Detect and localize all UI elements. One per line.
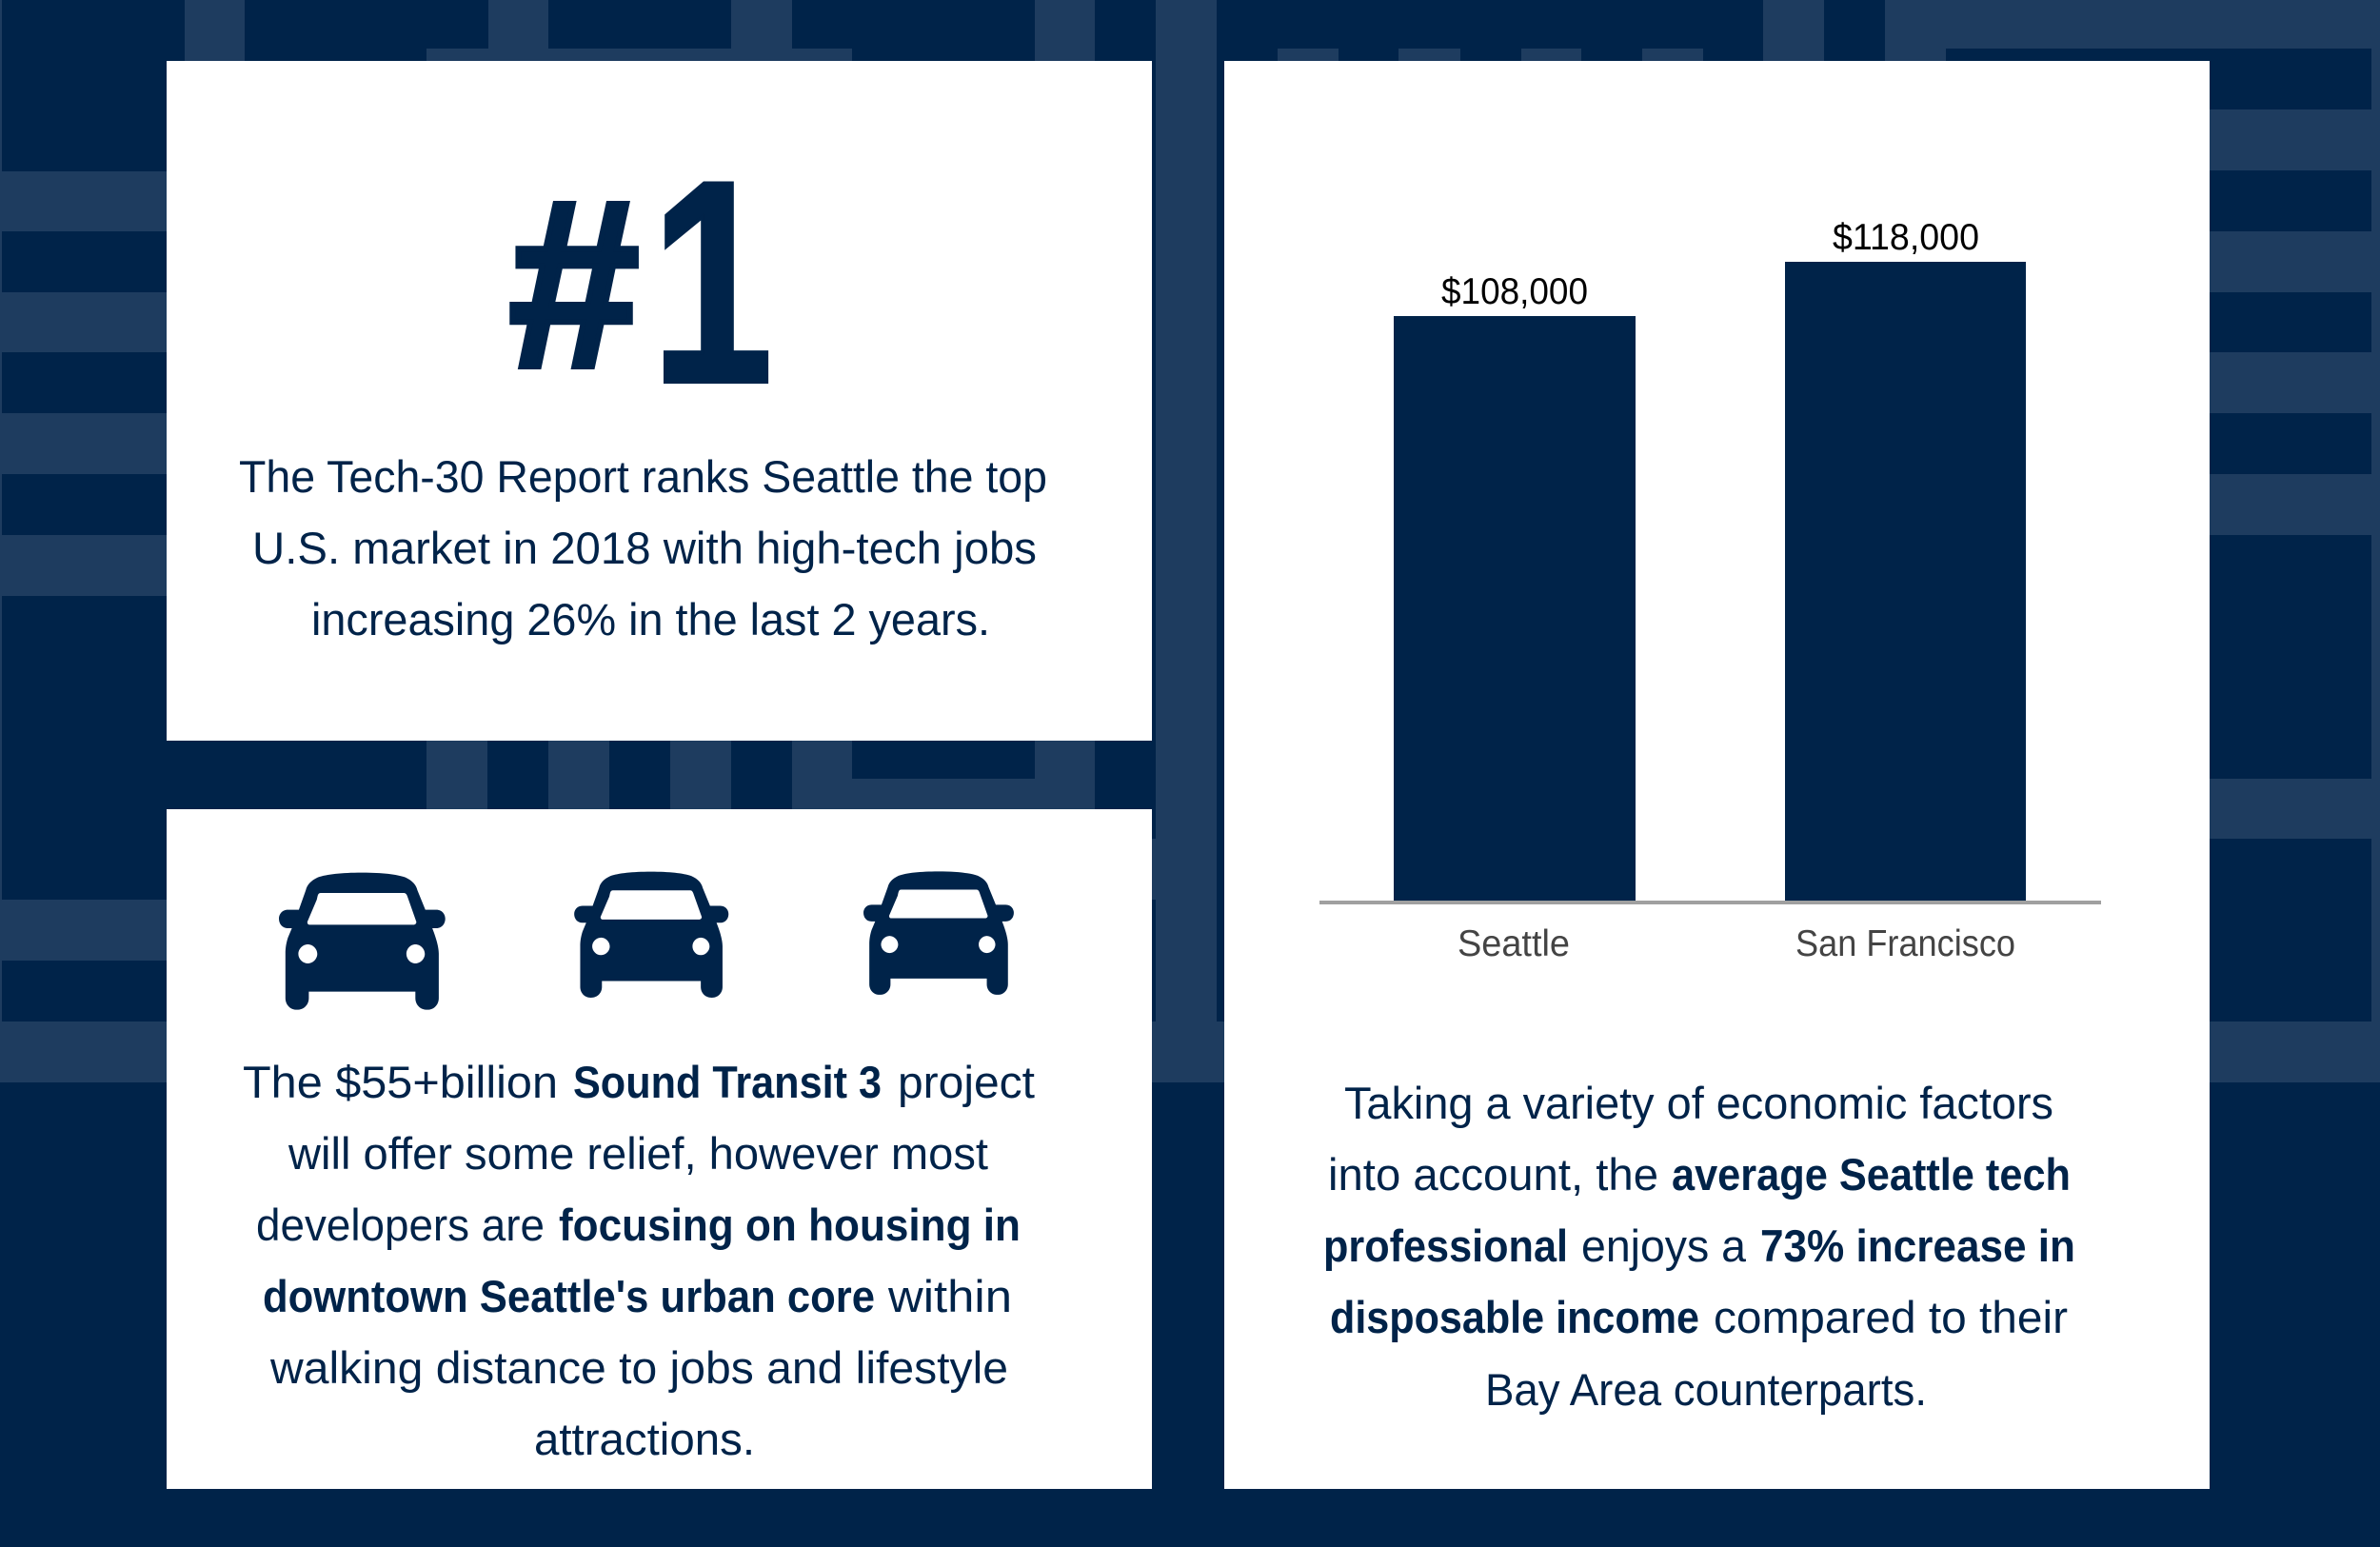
heading: #1 — [508, 122, 773, 444]
heading: #1: 1 — [651, 122, 773, 444]
text block: Tech-30 Report: U.S. market in 2018 with high-tech jobs — [252, 523, 1037, 573]
text block: disposable income: Bay Area counterparts. — [1485, 1364, 1927, 1415]
bar: Seattle — [1394, 316, 1636, 901]
text block: Sound Transit 3 description: developers are — [256, 1200, 545, 1250]
icon: car 3 — [863, 871, 1014, 995]
text block: disposable income: compared to their — [1714, 1292, 2068, 1342]
text block: Tech-30 Report: increasing 26% in the last 2 years. — [311, 594, 990, 645]
text block: Sound Transit 3 description — [243, 1057, 1035, 1464]
text block: disposable income: professional — [1323, 1220, 1568, 1271]
text block: Sound Transit 3 description: The $55+billion — [243, 1057, 558, 1107]
text block: disposable income: average Seattle tech — [1672, 1149, 2071, 1200]
axis label: San Francisco: San Francisco — [1795, 923, 2015, 964]
text block: disposable income — [1323, 1078, 2075, 1415]
value label: Seattle: $108,000 — [1441, 271, 1588, 312]
text block: Sound Transit 3 description: project — [898, 1057, 1035, 1107]
text block: Sound Transit 3 description: focusing on housing in — [559, 1200, 1021, 1250]
icon: three cars — [279, 871, 1014, 1010]
bar: San Francisco — [1785, 262, 2026, 901]
heading: #1: # — [508, 151, 640, 418]
text block: disposable income: into account, the — [1328, 1149, 1658, 1200]
text block: disposable income: Taking a variety of economic factors — [1344, 1078, 2053, 1128]
text block: Tech-30 Report: The Tech-30 Report ranks Seattle the top — [239, 451, 1047, 502]
text block: Sound Transit 3 description: walking distance to jobs and lifestyle — [269, 1342, 1008, 1393]
panel: Sound Transit 3 — [167, 809, 1152, 1489]
panel: #1 ranking — [167, 61, 1152, 741]
text block: disposable income: disposable income — [1330, 1292, 1699, 1342]
panel: salary comparison — [1224, 61, 2210, 1489]
text block: Tech-30 Report — [239, 451, 1047, 645]
text block: Sound Transit 3 description: downtown Seattle's urban core — [263, 1271, 875, 1321]
bar chart — [1319, 217, 2101, 964]
icon: car 1 — [279, 873, 446, 1010]
text block: Sound Transit 3 description: Sound Transit 3 — [573, 1057, 882, 1107]
icon: car 2 — [574, 872, 728, 998]
axis label: Seattle: Seattle — [1458, 923, 1570, 964]
text block: disposable income: enjoys a — [1581, 1220, 1747, 1271]
text block: Sound Transit 3 description: will offer some relief, however most — [288, 1128, 988, 1179]
text block: Sound Transit 3 description: within — [887, 1271, 1012, 1321]
text block: disposable income: 73% increase in — [1760, 1220, 2075, 1271]
value label: San Francisco: $118,000 — [1833, 217, 1979, 258]
text block: Sound Transit 3 description: attractions. — [534, 1414, 755, 1464]
